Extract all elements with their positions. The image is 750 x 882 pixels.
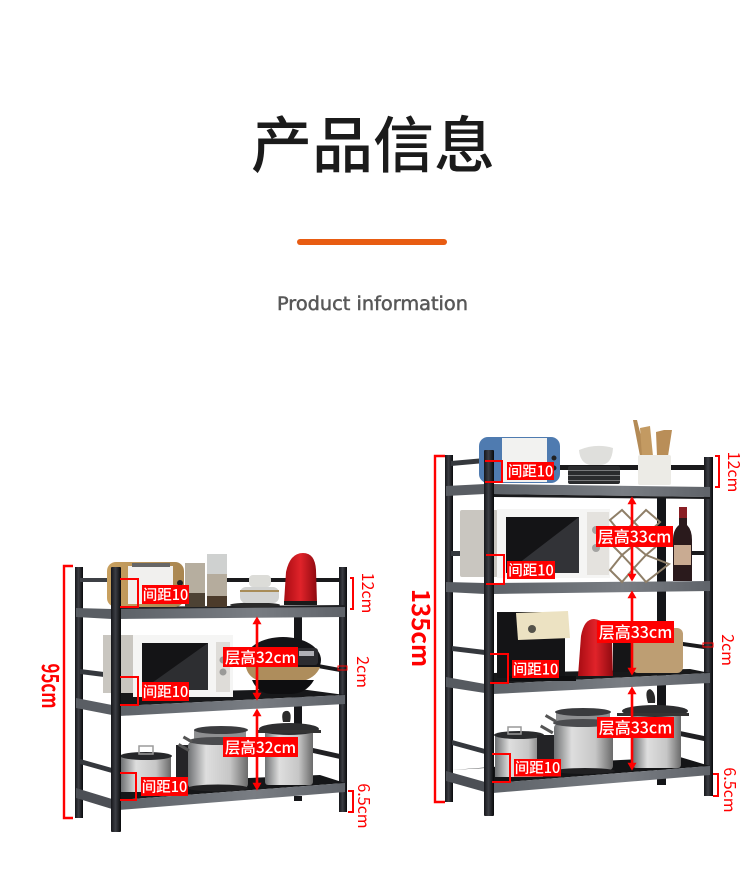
kettle [284,553,317,605]
total height label: 135cm [405,589,440,667]
rice cooker [245,637,321,694]
spacing label 1: 间距10 [508,460,553,482]
spacing label 2: 间距10 [508,560,554,580]
front left post [111,567,121,832]
small pot [494,727,544,777]
toaster [107,562,184,607]
height arrow lower [253,709,261,790]
plates and bowls [230,575,280,608]
tier height label 1: 层高33cm [598,524,671,548]
dimensions: 4-tier shelf [405,452,747,813]
height arrow 3 [628,687,636,770]
dimensions: 3-tier shelf [35,566,381,829]
shelf: 4-tier 135cm [445,420,713,816]
top gap label: 12cm [723,452,747,492]
tube bracket [703,643,713,647]
height arrow 2 [628,591,636,675]
back frame [75,567,347,818]
spacing brackets [120,579,138,800]
tier height label 3: 层高33cm [599,714,672,738]
shelf boards [446,484,710,793]
front left post [484,450,494,816]
shelf: 3-tier 95cm [75,553,347,832]
top gap bracket [715,456,719,487]
tube label: 2cm [717,634,741,666]
top gap label: 12cm [357,573,381,613]
height arrow 1 [628,497,636,581]
spacing label 3: 间距10 [142,776,187,797]
spacing brackets [485,461,510,782]
coffee machine [497,611,576,681]
shelf boards [76,605,345,810]
tube label: 2cm [352,656,376,688]
total height bracket [435,456,445,802]
spacing label 2: 间距10 [143,681,188,702]
foot bracket [348,791,353,812]
spacing label 4: 间距10 [515,757,560,778]
tier height label 1: 层高32cm [225,646,296,668]
tube bracket [338,666,347,670]
foot bracket [713,774,718,796]
stacked pots [537,708,615,774]
gold toaster [613,628,683,673]
foot label: 6.5cm [353,783,377,829]
wine bottle [673,507,692,581]
small stock pot [120,746,172,792]
large pot [617,689,689,768]
spacing label 3: 间距10 [513,658,558,680]
subtitle: Product information [277,294,468,315]
foot label: 6.5cm [719,767,743,813]
stacked pots [176,726,248,792]
plates and bowls [568,446,620,484]
title: 产品信息 [251,96,495,185]
spacing label 1: 间距10 [143,584,188,605]
blue toaster [479,437,560,483]
back frame [445,455,713,802]
microwave [103,635,233,697]
kettle [578,619,613,676]
microwave [460,509,610,578]
top gap bracket [350,578,353,609]
large pot [257,711,321,785]
orange divider bar [297,239,447,245]
utensil cup [633,420,672,485]
total height bracket [64,566,73,818]
tier height label 2: 层高33cm [599,619,672,643]
wine rack [610,510,669,582]
spice jars [185,554,227,607]
total height label: 95cm [35,664,69,708]
tier height label 2: 层高32cm [225,736,296,758]
height arrow upper [253,617,261,700]
